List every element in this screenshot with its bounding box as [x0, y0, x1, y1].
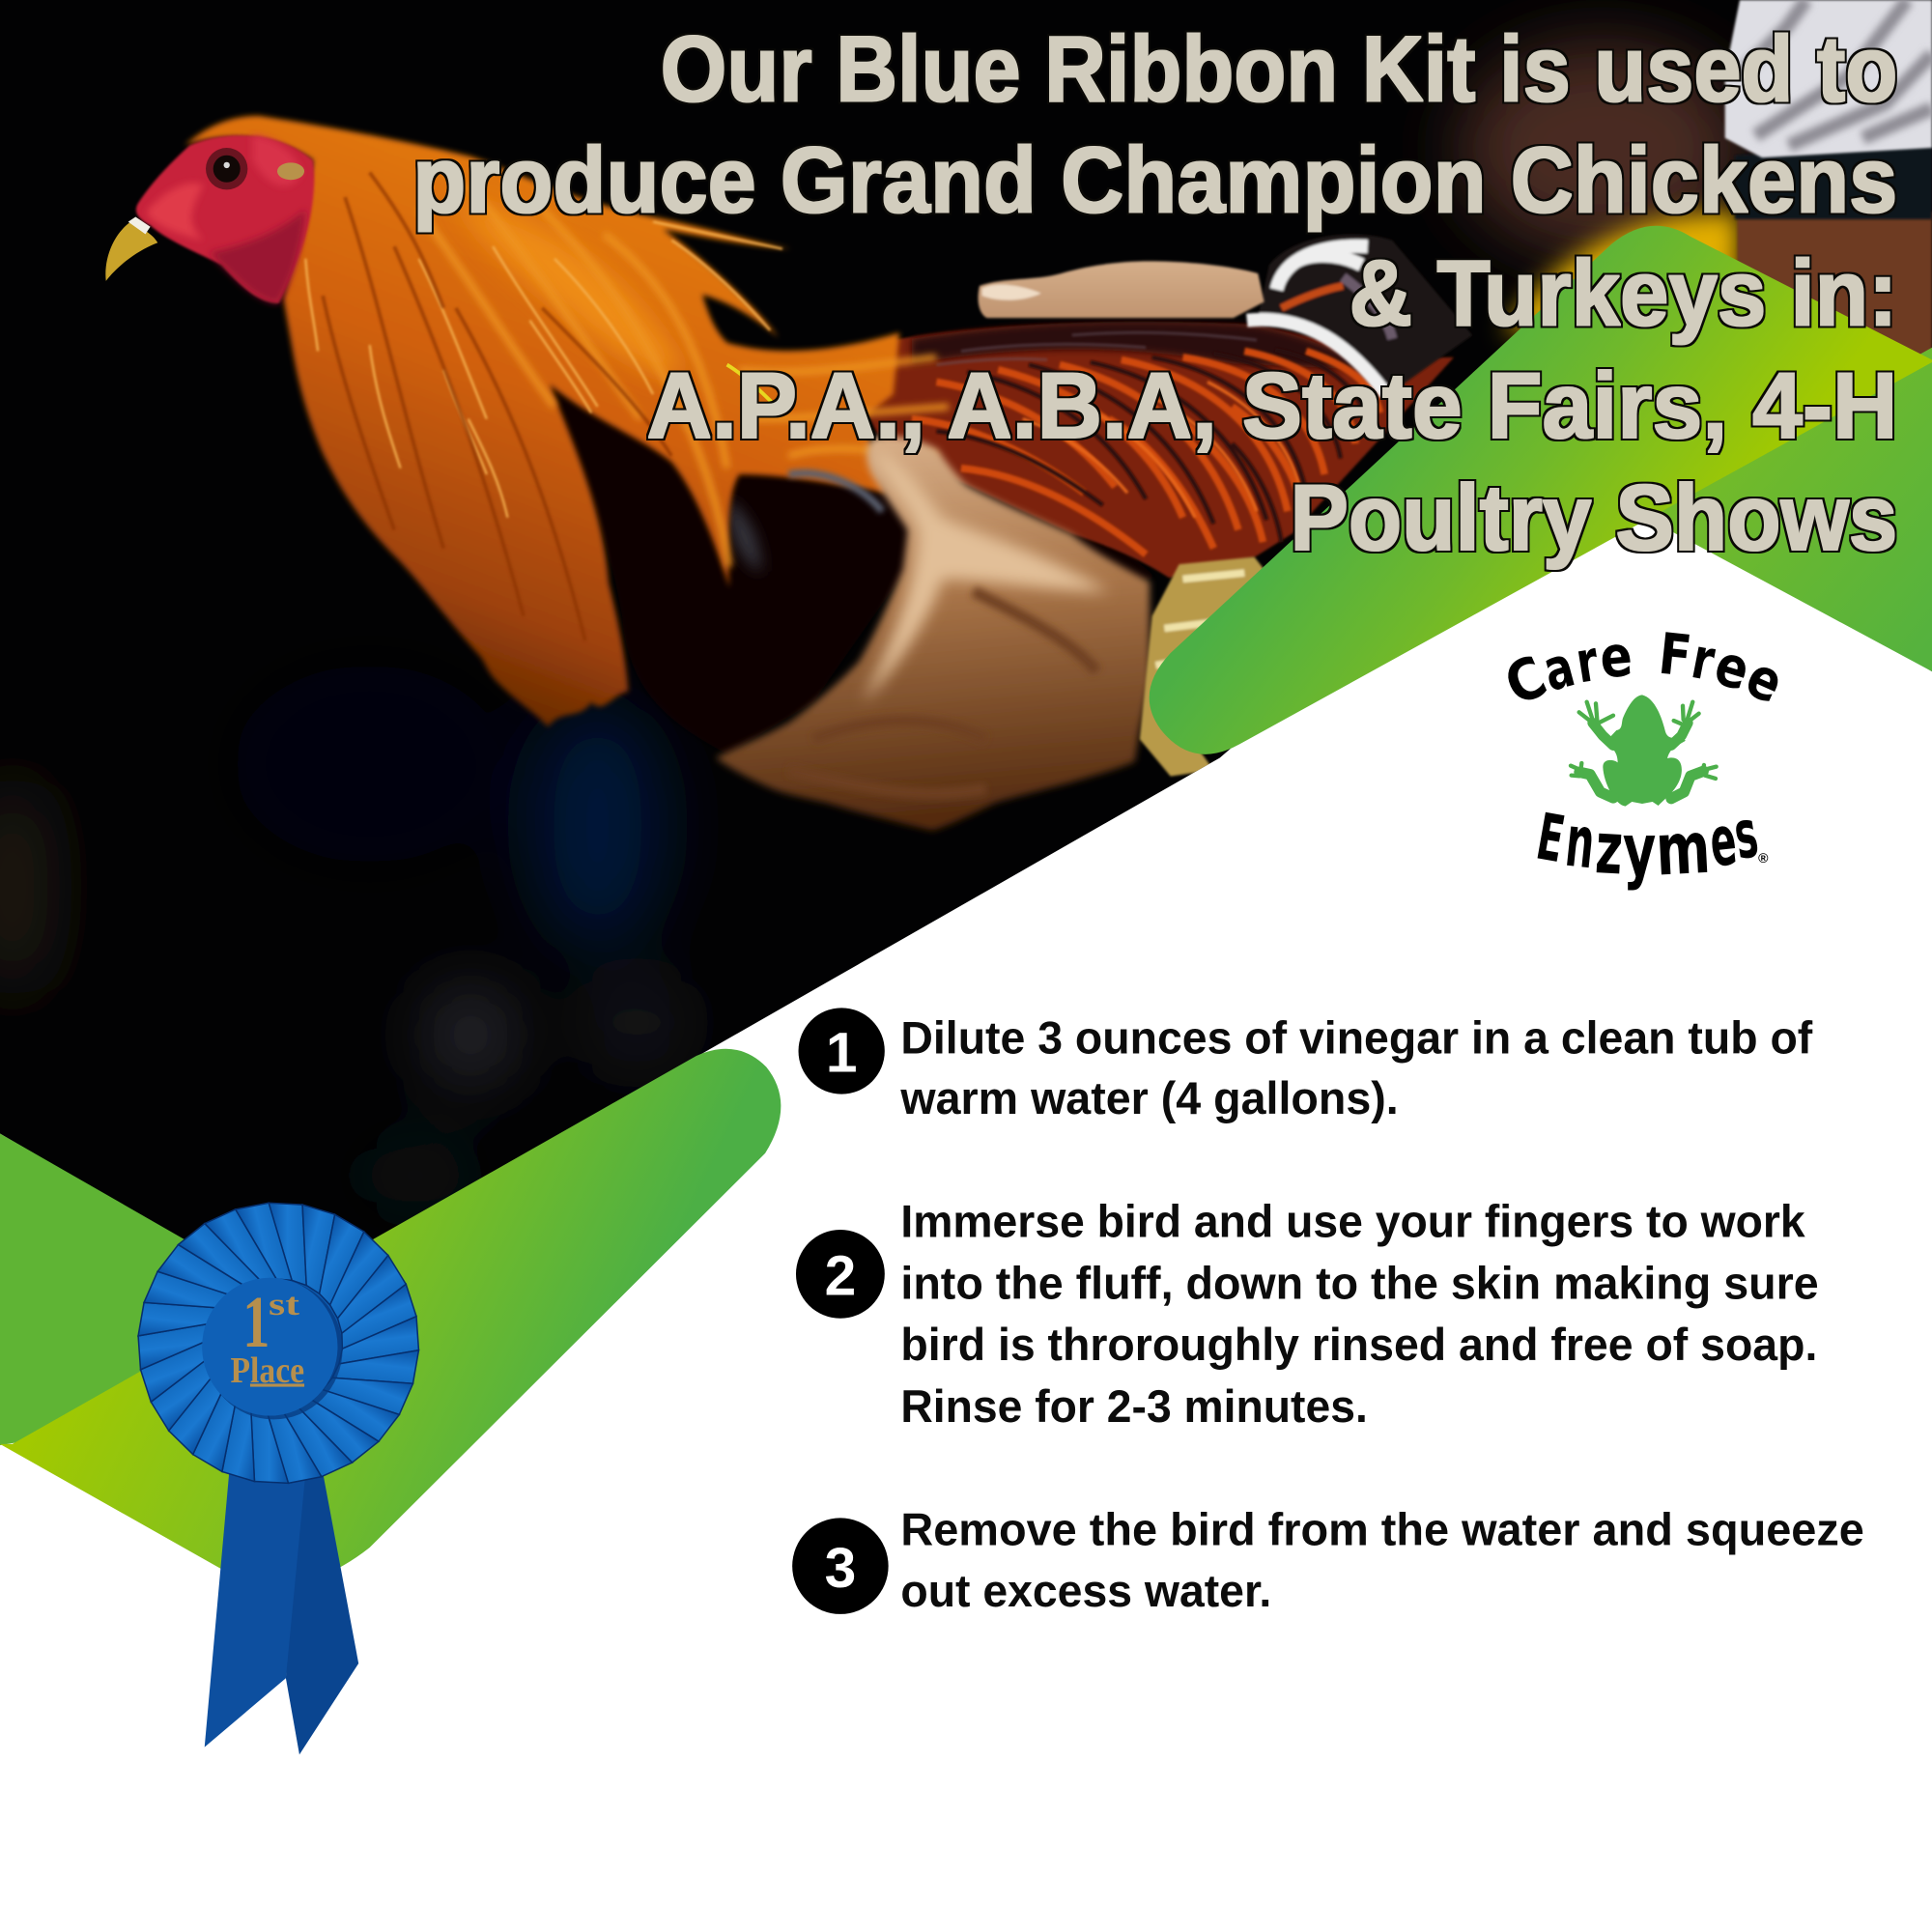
ribbon tail left: [205, 1472, 305, 1747]
step 2 text: Immerse bird and use your fingers to work: [900, 1197, 1805, 1248]
icon: green frog: [1571, 695, 1717, 807]
green chevron: bottom left: [0, 1049, 781, 1579]
upper hand: [979, 261, 1264, 318]
step 3 text: out excess water.: [900, 1566, 1271, 1617]
logo wordmark top: e: [1597, 623, 1634, 691]
photo: rooster held in hands: [0, 0, 1932, 1239]
rosette centre button: st: [269, 1287, 299, 1322]
rosette centre button: 1: [242, 1281, 270, 1363]
green chevron: top right: [1150, 226, 1932, 754]
number badge 2: 2: [825, 1245, 856, 1308]
step 2 text: bird is throroughly rinsed and free of soap.: [900, 1320, 1817, 1371]
logo wordmark bottom: e: [1706, 800, 1740, 883]
step 1 text: Dilute 3 ounces of vinegar in a clean tub of: [900, 1013, 1813, 1065]
number badge 3: 3: [825, 1537, 856, 1600]
logo wordmark bottom: s: [1729, 795, 1763, 875]
step 2 text: Rinse for 2-3 minutes.: [900, 1381, 1368, 1433]
title heading: [412, 16, 1897, 570]
title heading: Poultry Shows: [1290, 465, 1897, 570]
logo wordmark top: e: [1737, 643, 1793, 717]
step 1: [799, 1008, 1813, 1124]
logo wordmark top: r: [1572, 628, 1603, 696]
blurred arm and sleeve at top right: [1460, 0, 1932, 382]
title heading: & Turkeys in:: [1350, 241, 1897, 346]
logo wordmark bottom: E: [1531, 799, 1570, 877]
title heading: A.P.A., A.B.A, State Fairs, 4-H: [647, 353, 1897, 458]
number badge 1: [799, 1008, 885, 1094]
logo wordmark bottom: n: [1562, 800, 1599, 885]
logo wordmark top: e: [1708, 632, 1757, 703]
number badge 3: [792, 1518, 889, 1614]
logo wordmark top: r: [1687, 625, 1719, 694]
logo wordmark bottom: [1531, 795, 1763, 893]
rosette pleats: [136, 1201, 421, 1486]
step 2 text: [900, 1197, 1819, 1433]
logo wordmark bottom: m: [1654, 807, 1713, 893]
ribbon tail right: [286, 1472, 358, 1754]
red-brown saddle feathers: [866, 322, 1454, 578]
registered mark: ®: [1758, 850, 1769, 866]
rosette centre button: [202, 1278, 343, 1419]
step 1 text: [899, 1013, 1813, 1124]
lower hand: [716, 437, 1150, 831]
step 1 text: warm water (4 gallons).: [899, 1073, 1399, 1124]
dark body of the bird: [556, 394, 1151, 752]
rooster head: [105, 135, 314, 303]
gold watch: [1140, 557, 1282, 777]
logo wordmark top: a: [1537, 634, 1581, 704]
white tail feathers: [1247, 235, 1472, 394]
step 3 text: [900, 1504, 1864, 1617]
number badge 1: 1: [826, 1022, 857, 1085]
step 3: [792, 1504, 1864, 1617]
logo wordmark top: F: [1656, 621, 1694, 690]
logo wordmark top: C: [1495, 643, 1556, 719]
logo: Care Free Enzymes: [1495, 621, 1793, 893]
number badge 2: [796, 1230, 885, 1319]
step 2: [796, 1197, 1819, 1433]
step 3 text: Remove the bird from the water and squeeze: [900, 1504, 1864, 1555]
neck hackle feathers: [185, 116, 949, 727]
dark blurred background with bokeh: [0, 666, 681, 1208]
logo wordmark bottom: y: [1623, 810, 1656, 893]
logo wordmark bottom: z: [1594, 807, 1625, 892]
logo wordmark top: [1495, 621, 1793, 719]
rosette centre button: Place: [231, 1350, 304, 1391]
step 2 text: into the fluff, down to the skin making sure: [900, 1258, 1819, 1309]
blue first place ribbon: [136, 1201, 421, 1754]
